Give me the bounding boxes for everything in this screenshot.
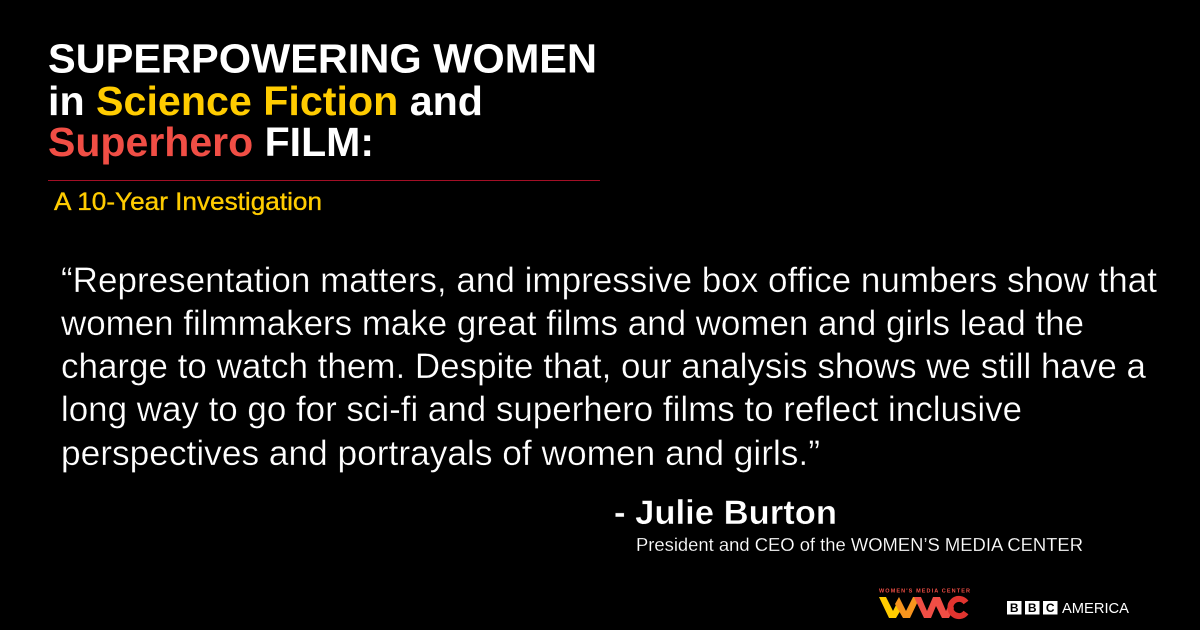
title: SUPERPOWERING WOMEN (48, 36, 597, 82)
logo: Women's Media Center: WOMEN'S MEDIA CENTER (879, 588, 970, 594)
quote: women filmmakers make great films and women and girls lead the (60, 303, 1084, 343)
quote: perspectives and portrayals of women and girls.” (61, 433, 820, 473)
logo: BBC America: B (1028, 601, 1037, 615)
attribution name: - Julie Burton (614, 494, 837, 532)
logo: BBC America: B (1010, 601, 1019, 615)
attribution role: President and CEO of the WOMEN’S MEDIA CENTER (636, 535, 1083, 555)
title: Superhero FILM: (48, 119, 374, 165)
quote: long way to go for sci-fi and superhero films to reflect inclusive (61, 389, 1022, 429)
title: in Science Fiction and (48, 78, 483, 124)
logo: Women's Media Center (879, 588, 970, 618)
title (48, 36, 597, 165)
quote (60, 260, 1157, 473)
logo: BBC America (1007, 601, 1129, 617)
quote: “Representation matters, and impressive box office numbers show that (61, 260, 1157, 300)
logo: BBC America: C (1046, 601, 1055, 615)
quote: charge to watch them. Despite that, our analysis shows we still have a (61, 346, 1146, 386)
subtitle: A 10-Year Investigation (54, 188, 322, 216)
logo: BBC America: AMERICA (1062, 601, 1129, 617)
